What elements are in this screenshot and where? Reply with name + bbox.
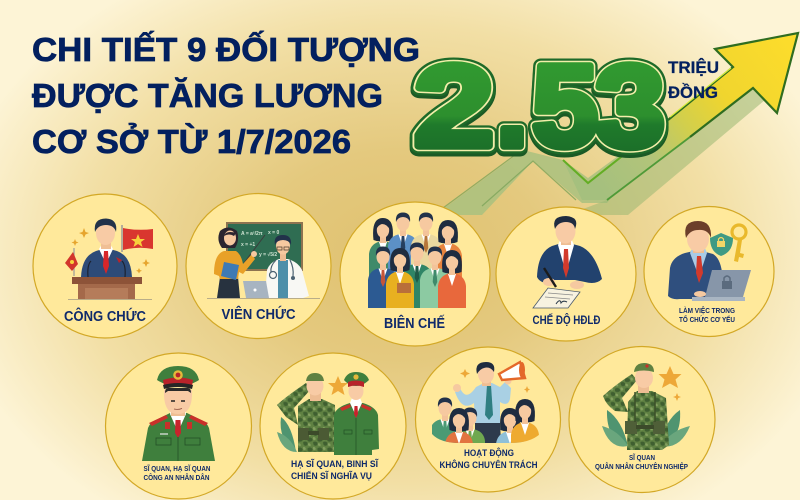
panel: sĩ quan quân nhân chuyên nghiệp (569, 346, 715, 492)
icon: civil servant at podium (65, 218, 153, 300)
label: sĩ quan quân nhân chuyên nghiệp: SĨ QUAN (629, 453, 655, 462)
icon: teacher and doctor: A = a²/2π (241, 231, 263, 237)
icon: teacher and doctor: x = +1 (241, 242, 255, 248)
panel: biên chế (340, 202, 490, 346)
icon: teacher and doctor: x = 0 (268, 230, 279, 236)
big number 2.53: . (496, 41, 528, 171)
label: sĩ quan quân nhân chuyên nghiệp (595, 453, 688, 471)
unit label (668, 58, 719, 102)
big number 2.53: . (496, 41, 528, 171)
icon: soldiers saluting (277, 372, 379, 455)
label: công an nhân dân: CÔNG AN NHÂN DÂN (144, 473, 210, 482)
label: hoạt động không chuyên trách: KHÔNG CHUYÊN TRÁCH (440, 459, 538, 471)
big number 2.53: 5 (532, 41, 598, 171)
label: hoạt động không chuyên trách: HOẠT ĐỘNG (464, 447, 514, 459)
panel: công an nhân dân (106, 353, 252, 499)
icon: saluting soldier (602, 363, 690, 450)
big number 2.53: . (496, 41, 528, 171)
icon: man signing contract (533, 216, 602, 308)
label: công an nhân dân (144, 464, 210, 482)
label: hạ sĩ quan, binh sĩ (291, 459, 378, 481)
big number 2.53: 2 (414, 44, 494, 174)
panel: hoạt động không chuyên trách (416, 347, 560, 492)
label: sĩ quan quân nhân chuyên nghiệp: QUÂN NHÂN CHUYÊN NGHIỆP (595, 462, 688, 471)
label: hạ sĩ quan, binh sĩ: CHIẾN SĨ NGHĨA VỤ (291, 471, 372, 481)
title: ĐƯỢC TĂNG LƯƠNG (32, 77, 383, 115)
label: chế độ hđlđ: CHẾ ĐỘ HĐLĐ (532, 314, 600, 327)
big number 2.53: 5 (532, 41, 598, 171)
icon: teacher and doctor (207, 223, 320, 298)
label: biên chế: BIÊN CHẾ (384, 314, 445, 332)
big number 2.53: 2 (414, 41, 494, 171)
label: công chức: CÔNG CHỨC (64, 307, 146, 325)
label: làm việc trong tổ chức cơ yếu: TỔ CHỨC CƠ YẾU (679, 314, 735, 324)
big number 2.53: 3 (595, 41, 665, 171)
label: làm việc trong tổ chức cơ yếu: LÀM VIỆC TRONG (679, 306, 736, 315)
label: viên chức: VIÊN CHỨC (222, 305, 296, 323)
unit label: ĐỒNG (668, 83, 718, 102)
title: CƠ SỞ TỪ 1/7/2026 (32, 123, 351, 161)
panel: chế độ hđlđ (496, 207, 636, 341)
icon: man with shield, key and laptop (668, 221, 751, 301)
panel: làm việc trong tổ chức cơ yếu (644, 206, 774, 336)
big number 2.53: 2 (414, 41, 494, 171)
big number 2.53 (414, 41, 665, 174)
unit label: TRIỆU (668, 58, 719, 77)
title (32, 30, 420, 161)
growth arrow (435, 33, 798, 215)
big number 2.53: 3 (595, 41, 665, 171)
icon: man with megaphone and crowd (432, 360, 539, 443)
label: hạ sĩ quan, binh sĩ: HẠ SĨ QUAN, BINH SĨ (291, 459, 378, 469)
label: công an nhân dân: SĨ QUAN, HẠ SĨ QUAN (144, 464, 210, 473)
panel: công chức (33, 194, 177, 338)
title: CHI TIẾT 9 ĐỐI TƯỢNG (32, 30, 420, 69)
big number 2.53: 2 (414, 41, 494, 171)
icon: group of staff (368, 212, 466, 308)
big number 2.53: 3 (595, 41, 665, 171)
label: hoạt động không chuyên trách (440, 447, 538, 471)
icon: teacher and doctor: y = √5/2 (259, 252, 277, 258)
panel: hạ sĩ quan, binh sĩ (260, 353, 406, 499)
big number 2.53: 5 (532, 44, 598, 174)
big number 2.53: . (496, 44, 528, 174)
big number 2.53: 5 (532, 41, 598, 171)
big number 2.53: 3 (595, 44, 665, 174)
icon: police officer (142, 366, 215, 461)
label: làm việc trong tổ chức cơ yếu (679, 306, 736, 324)
panel: viên chức (186, 194, 331, 338)
